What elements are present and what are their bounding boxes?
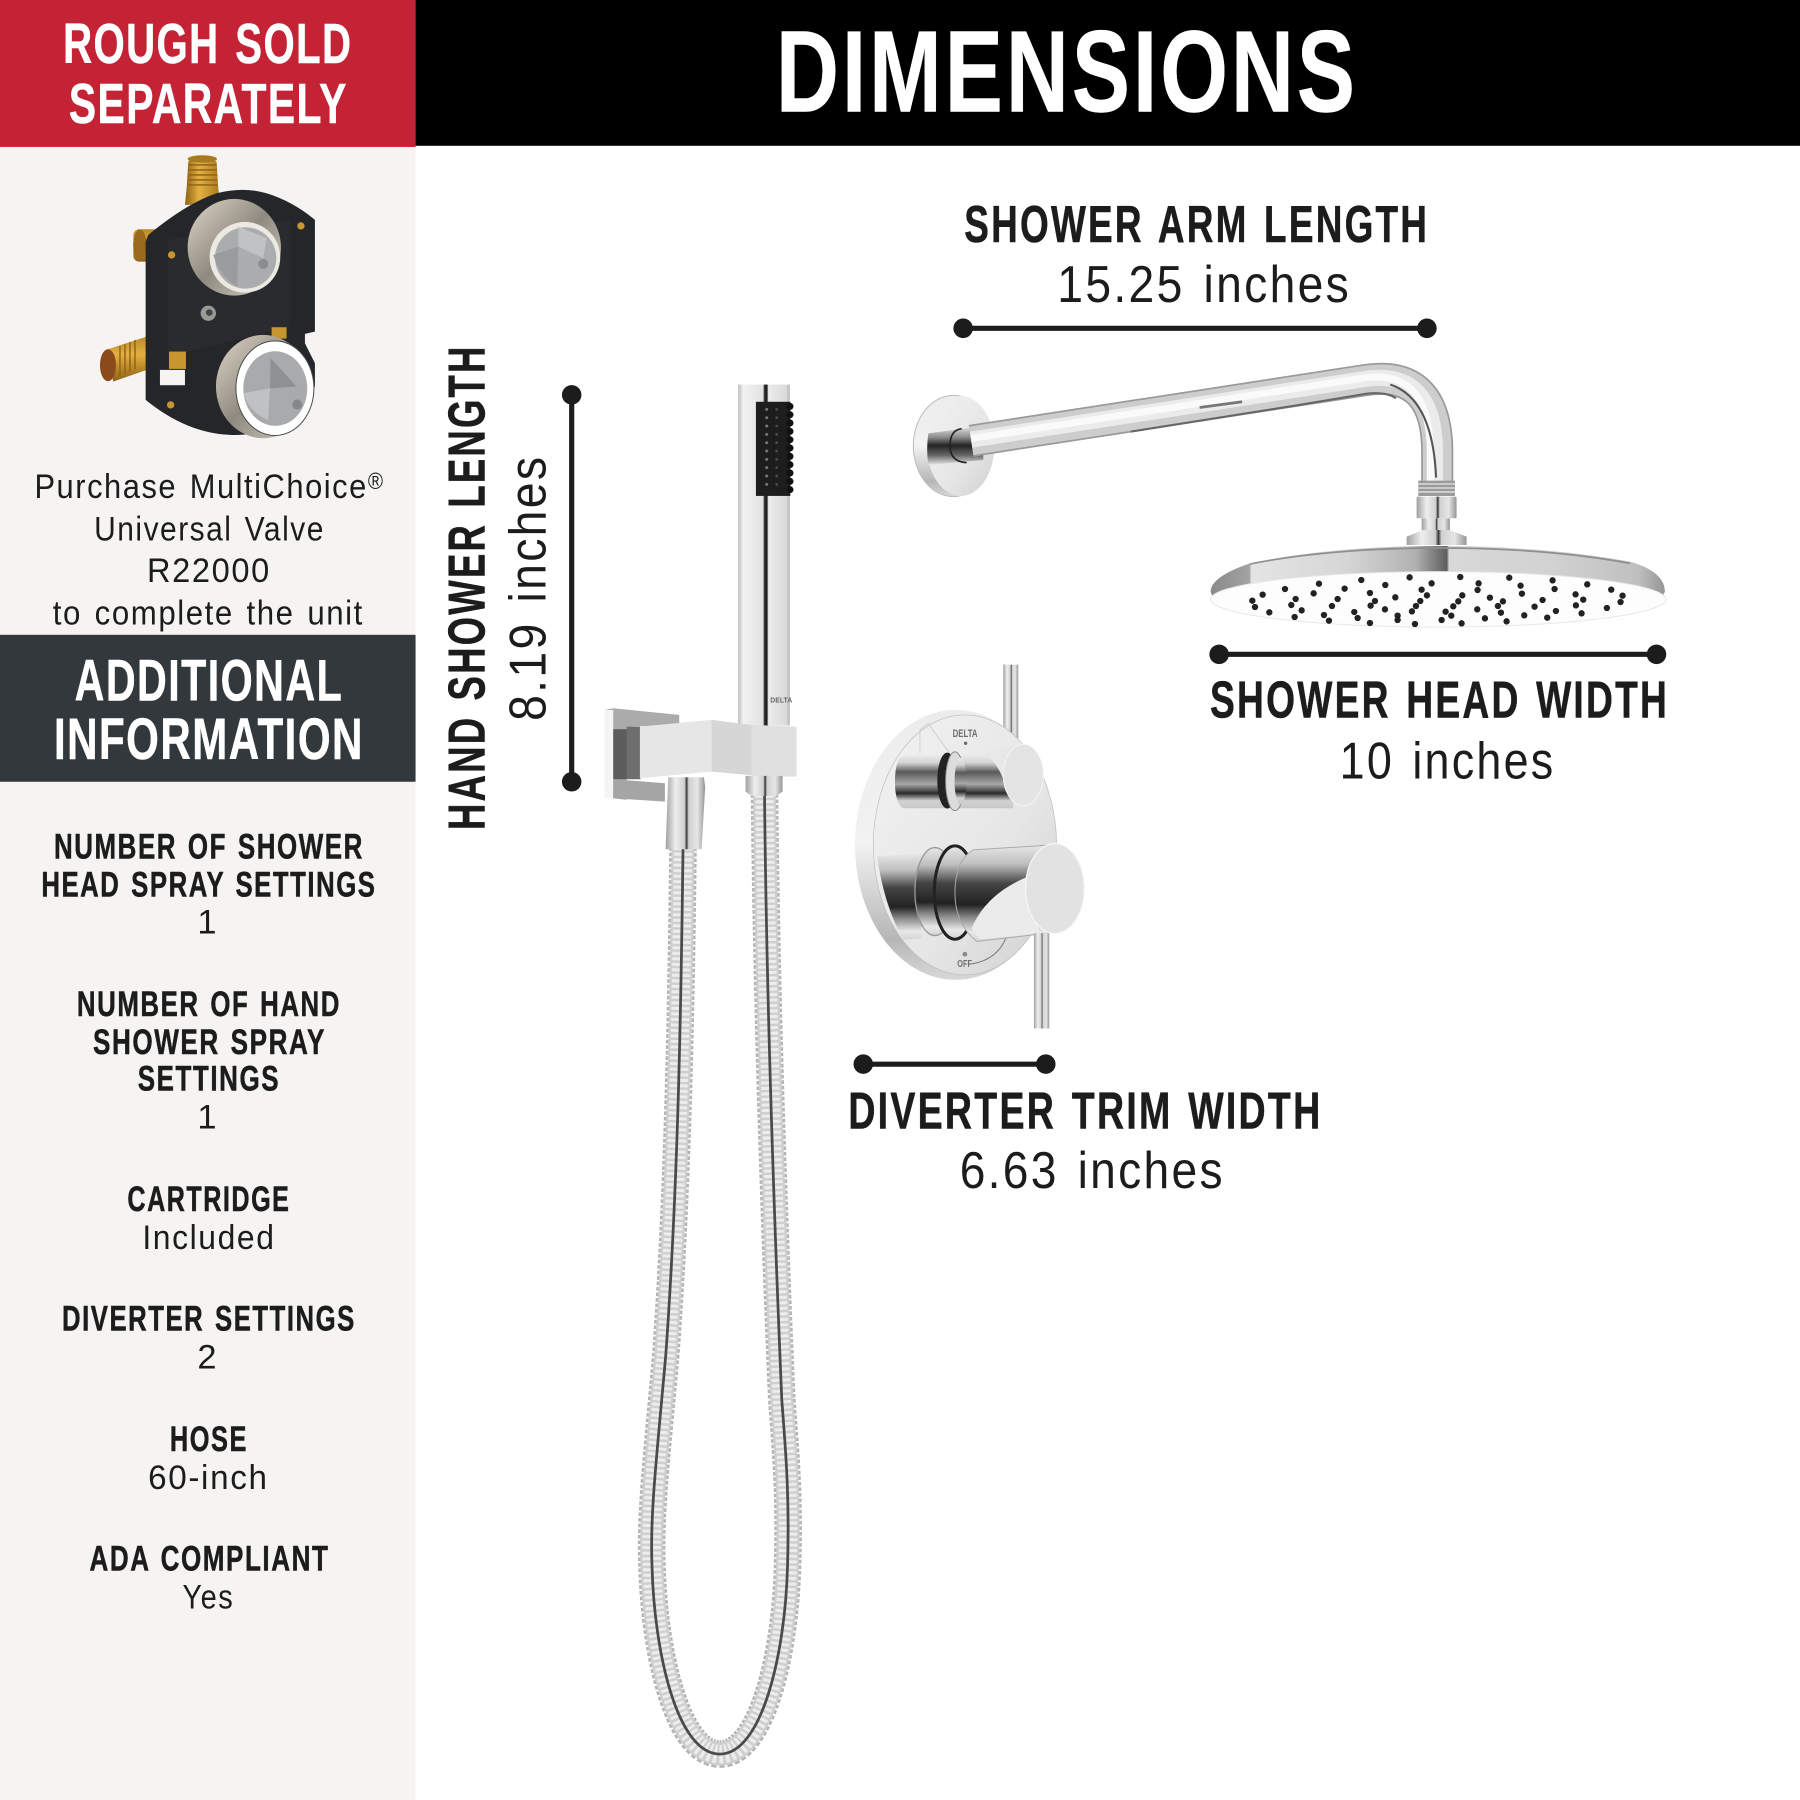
spec: hand shower spray settings: SETTINGS — [138, 1059, 280, 1099]
dimension: diverter trim width — [848, 1054, 1322, 1199]
spec: cartridge — [127, 1179, 290, 1257]
banner: rough sold separately: SEPARATELY — [69, 72, 348, 135]
trim plate: OFF — [957, 959, 972, 970]
spec: ada compliant: Yes — [183, 1578, 234, 1616]
arm — [971, 377, 1437, 482]
spec: diverter settings: 2 — [197, 1338, 218, 1376]
spec: hand shower spray settings — [77, 984, 341, 1136]
spec: shower head spray settings: 1 — [197, 903, 218, 941]
dimension: shower head width — [1209, 645, 1669, 789]
spec: ada compliant — [90, 1538, 329, 1616]
spec: hand shower spray settings: SHOWER SPRAY — [93, 1022, 326, 1062]
spec: diverter settings — [62, 1298, 356, 1376]
spec: shower head spray settings: HEAD SPRAY SETTINGS — [41, 865, 377, 905]
text block: purchase note: to complete the unit — [53, 594, 364, 632]
handle: DELTA — [770, 698, 792, 705]
lower handle — [915, 844, 1084, 942]
lower lever — [1034, 933, 1049, 1029]
trim plate: DELTA — [953, 728, 978, 740]
wall bracket — [605, 708, 797, 849]
product: diverter trim — [855, 665, 1084, 1029]
spec: diverter settings: DIVERTER SETTINGS — [62, 1298, 356, 1338]
dimension: hand shower length: HAND SHOWER LENGTH — [437, 344, 495, 830]
spec: shower head spray settings — [41, 827, 377, 941]
trim plate — [855, 710, 1057, 980]
dimension: hand shower length: 8.19 inches — [498, 455, 556, 721]
spec: hand shower spray settings: NUMBER OF HAND — [77, 984, 341, 1024]
icon: universal valve — [100, 155, 315, 438]
head — [1211, 546, 1666, 627]
heading: additional information: INFORMATION — [54, 707, 364, 772]
connector — [1407, 481, 1467, 545]
dimension: diverter trim width: 6.63 inches — [960, 1141, 1225, 1199]
text block: purchase note: Universal Valve — [94, 511, 325, 549]
dimension: diverter trim width: DIVERTER TRIM WIDTH — [848, 1081, 1322, 1139]
spec: cartridge: Included — [142, 1219, 276, 1257]
header: dimensions — [416, 0, 1800, 146]
heading: additional information: ADDITIONAL — [75, 648, 343, 713]
product: shower arm and head — [913, 377, 1666, 627]
text block: purchase note: R22000 — [147, 552, 271, 590]
banner: rough sold separately: ROUGH SOLD — [63, 12, 352, 75]
spec: cartridge: CARTRIDGE — [127, 1179, 290, 1219]
sidebar panel background — [0, 0, 416, 1800]
spec: hose — [148, 1419, 269, 1497]
upper lever — [1003, 665, 1018, 748]
wall flange — [913, 395, 994, 497]
text block: purchase note — [34, 468, 385, 632]
spec: hose: 60-inch — [148, 1459, 269, 1497]
dimension: shower arm length: 15.25 inches — [1057, 255, 1351, 313]
upper handle — [895, 744, 1043, 811]
text block: purchase note: Purchase MultiChoice — [34, 468, 406, 506]
handle — [738, 385, 792, 726]
heading: additional information — [0, 635, 416, 782]
dimension: shower arm length: SHOWER ARM LENGTH — [964, 195, 1429, 253]
dimension: shower head width: 10 inches — [1340, 731, 1555, 789]
dimension: shower arm length — [953, 195, 1437, 338]
product: hand shower with bracket and hose — [605, 385, 797, 1754]
dimension: hand shower length — [437, 344, 581, 830]
header: dimensions: DIMENSIONS — [776, 6, 1358, 136]
spec: hand shower spray settings: 1 — [197, 1098, 218, 1136]
spec: ada compliant: ADA COMPLIANT — [90, 1538, 329, 1578]
hose — [652, 794, 788, 1754]
banner: rough sold separately — [0, 0, 416, 147]
text block: purchase note: ® — [368, 468, 385, 494]
spec: hose: HOSE — [170, 1419, 248, 1459]
spec: shower head spray settings: NUMBER OF SHOWER — [54, 827, 364, 867]
